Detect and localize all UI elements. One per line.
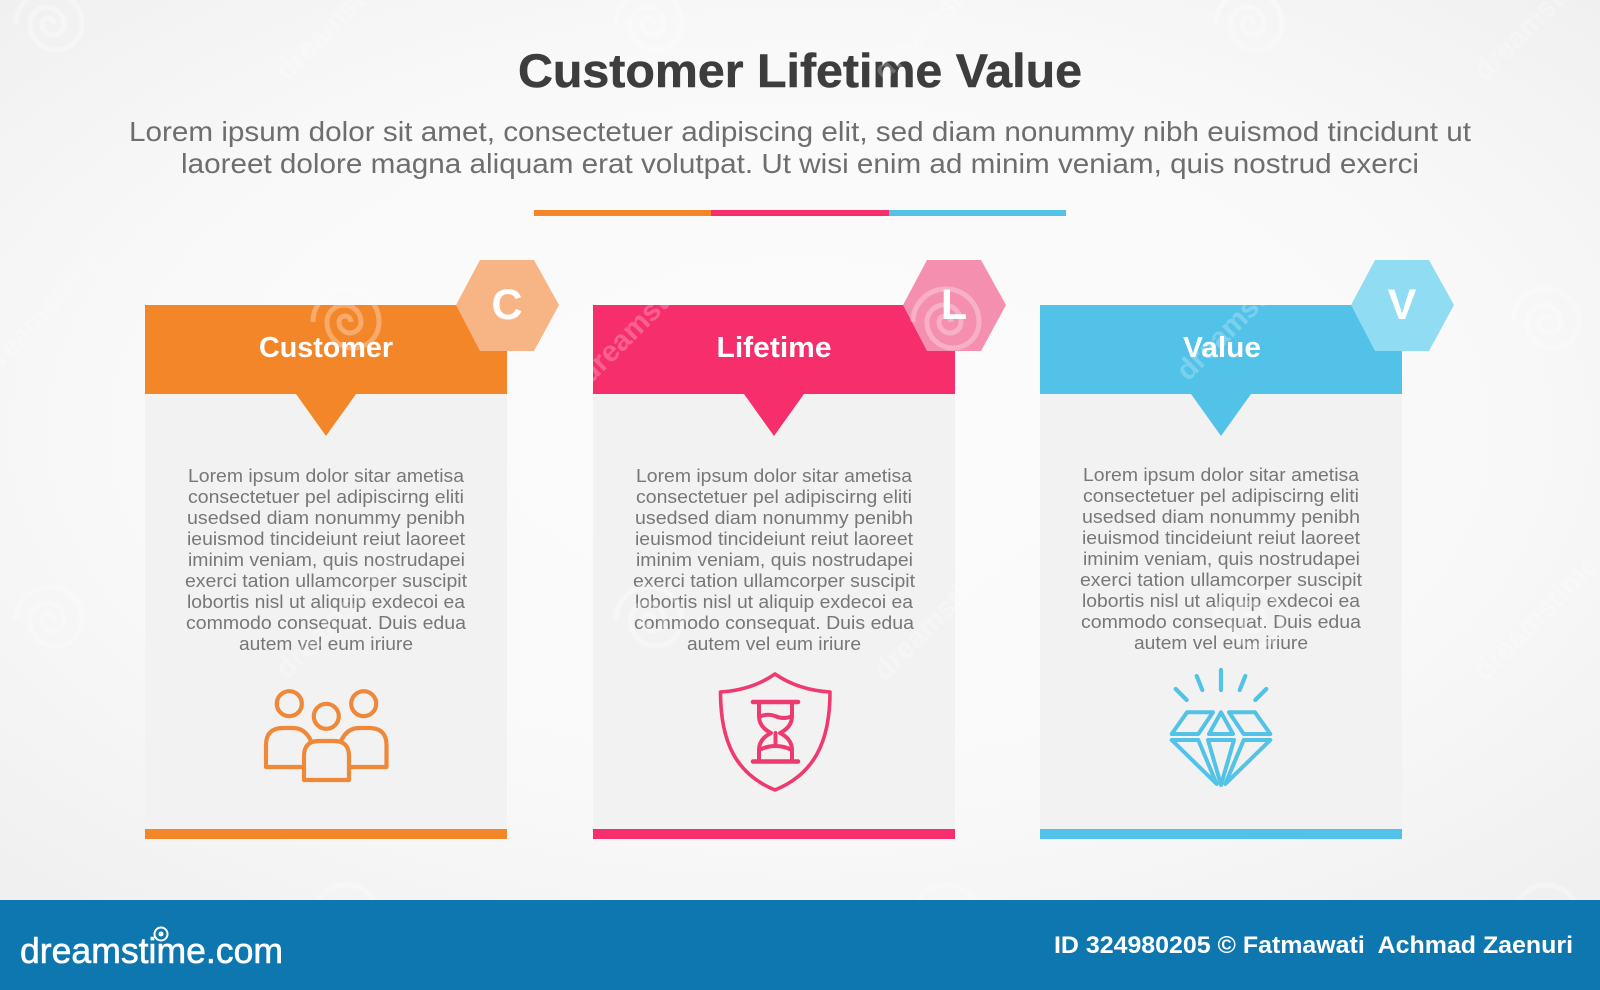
body text: consectetuer pel adipiscirng eliti	[1083, 485, 1359, 506]
body text	[185, 465, 467, 654]
body text: autem vel eum iriure	[239, 633, 413, 654]
panel background	[145, 394, 507, 839]
hexagon badge V: V	[1388, 281, 1417, 329]
body text: commodo consequat. Duis edua	[634, 612, 915, 633]
body text: usedsed diam nonummy penibh	[1082, 506, 1360, 527]
footer bar	[0, 900, 1600, 990]
bottom accent bar	[145, 829, 507, 839]
watermark pattern: dreamstime	[572, 252, 710, 390]
icon: shield with hourglass	[720, 674, 830, 790]
hexagon badge L	[903, 260, 1006, 351]
header banner with pointer	[145, 305, 507, 436]
body text: Lorem ipsum dolor sitar ametisa	[1083, 464, 1360, 485]
bottom accent bar	[1040, 829, 1402, 839]
watermark pattern: dreamstime	[867, 549, 1005, 687]
hexagon badge C	[456, 260, 559, 351]
subtitle text: Lorem ipsum dolor sit amet, consectetuer adipiscing elit, sed diam nonummy nibh euismod tincidunt ut	[129, 116, 1471, 147]
body text: iminim veniam, quis nostrudapei	[1083, 548, 1360, 569]
header banner with pointer	[1040, 305, 1402, 436]
watermark pattern: dreamstime	[1170, 249, 1308, 387]
body text: exerci tation ullamcorper suscipit	[633, 570, 915, 591]
body text: exerci tation ullamcorper suscipit	[1080, 569, 1362, 590]
body text: lobortis nisl ut aliquip exdecoi ea	[1082, 590, 1361, 611]
footer logo: dreamstime.com	[20, 930, 283, 971]
body text: ieuismod tincideiunt reiut laoreet	[635, 528, 913, 549]
panel background	[1040, 394, 1402, 839]
header banner with pointer	[593, 305, 955, 436]
body text: Lorem ipsum dolor sitar ametisa	[636, 465, 913, 486]
panel: lifetime	[593, 260, 1006, 839]
panel background	[593, 394, 955, 839]
header label: Lifetime	[716, 332, 832, 364]
body text: autem vel eum iriure	[1134, 632, 1308, 653]
body text: lobortis nisl ut aliquip exdecoi ea	[187, 591, 466, 612]
icon: people	[266, 691, 386, 780]
body text: commodo consequat. Duis edua	[186, 612, 467, 633]
hexagon badge C: C	[491, 281, 523, 329]
panel: customer	[145, 260, 559, 839]
panel: value	[1040, 260, 1454, 839]
footer credit: ID 324980205 © Fatmawati Achmad Zaenuri	[1054, 932, 1573, 959]
body text: lobortis nisl ut aliquip exdecoi ea	[635, 591, 914, 612]
title: Customer Lifetime Value	[518, 44, 1082, 97]
body text: exerci tation ullamcorper suscipit	[185, 570, 467, 591]
body text	[1080, 464, 1362, 653]
body text: autem vel eum iriure	[687, 633, 861, 654]
body text: ieuismod tincideiunt reiut laoreet	[1082, 527, 1360, 548]
subtitle text: laoreet dolore magna aliquam erat volutpat. Ut wisi enim ad minim veniam, quis nostrud exerci	[181, 148, 1419, 179]
bottom accent bar	[593, 829, 955, 839]
tricolor divider	[534, 210, 1066, 216]
body text: commodo consequat. Duis edua	[1081, 611, 1362, 632]
hexagon badge L: L	[941, 281, 967, 329]
body text: consectetuer pel adipiscirng eliti	[188, 486, 464, 507]
header label: Customer	[259, 332, 393, 364]
body text: ieuismod tincideiunt reiut laoreet	[187, 528, 465, 549]
body text	[633, 465, 915, 654]
header label: Value	[1183, 332, 1261, 364]
hexagon badge V	[1351, 260, 1454, 351]
body text: iminim veniam, quis nostrudapei	[188, 549, 465, 570]
body text: usedsed diam nonummy penibh	[187, 507, 465, 528]
watermark pattern: dreamstime	[269, 547, 407, 685]
body text: Lorem ipsum dolor sitar ametisa	[188, 465, 465, 486]
subtitle text	[129, 116, 1471, 179]
body text: usedsed diam nonummy penibh	[635, 507, 913, 528]
icon: diamond with rays	[1172, 670, 1270, 785]
body text: iminim veniam, quis nostrudapei	[636, 549, 913, 570]
body text: consectetuer pel adipiscirng eliti	[636, 486, 912, 507]
